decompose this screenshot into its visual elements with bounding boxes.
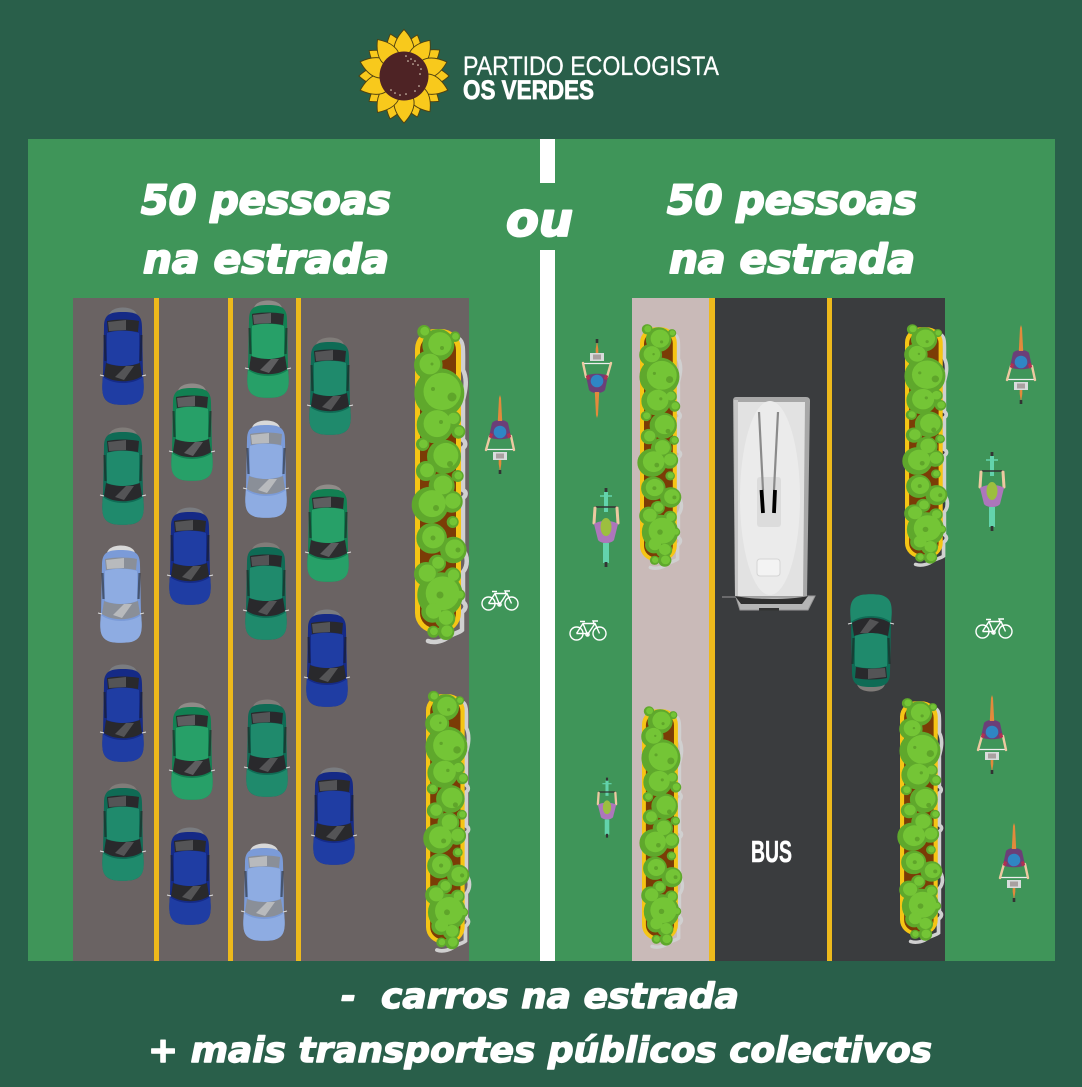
car: blue (167, 828, 213, 925)
cyclist: far right 4 (999, 823, 1029, 902)
panel: green background (28, 139, 1055, 961)
car: green (305, 484, 351, 582)
panel: left road with cars (73, 298, 469, 961)
road label: BUS: BUS (751, 834, 792, 869)
footer text line 1: - carros na estrada (341, 977, 739, 1017)
cyclist: left lane (485, 395, 515, 474)
panel: right road (632, 298, 945, 961)
car: blue (100, 308, 146, 405)
car: right road teal (848, 594, 894, 692)
car: teal (100, 784, 146, 881)
heading: ou: ou (506, 193, 573, 247)
sidewalk (632, 298, 709, 961)
planter: sidewalk upper (638, 325, 681, 568)
planter: right road lower (898, 699, 942, 942)
bus (722, 397, 815, 610)
icon: bicycle right lane (570, 621, 606, 640)
cyclist: far right 1 (1006, 325, 1036, 404)
road surface (709, 298, 945, 961)
car: teal (100, 428, 146, 525)
car: green (169, 384, 215, 481)
planter: left road upper (413, 326, 467, 642)
heading: left: 50 pessoas (141, 178, 391, 224)
car: blue (304, 610, 350, 707)
cyclist: far right 2 (980, 452, 1004, 531)
logo text line 1: PARTIDO ECOLOGISTA (463, 51, 719, 81)
icon: sunflower (357, 29, 451, 123)
divider: centre white line (540, 139, 555, 961)
car: green (245, 300, 291, 398)
heading: right: na estrada (669, 237, 915, 283)
cyclist: right lane 1 (582, 339, 612, 418)
icon: bicycle left lane (482, 591, 518, 610)
car: light blue (241, 844, 287, 941)
cyclist: right lane 2 (594, 488, 618, 567)
heading: right: 50 pessoas (667, 178, 917, 224)
car: teal (244, 700, 290, 797)
car: green (169, 702, 215, 800)
heading: left: na estrada (143, 237, 389, 283)
car: teal (243, 542, 289, 640)
planter: left road lower (424, 692, 469, 951)
car: blue (100, 664, 146, 762)
car: light blue (98, 546, 144, 643)
cyclist: far right 3 (977, 695, 1007, 774)
planter: right road upper (903, 325, 947, 565)
heading: right (667, 178, 917, 283)
logo: Partido Ecologista Os Verdes (357, 29, 719, 123)
car: blue (311, 768, 357, 865)
logo text line 2: OS VERDES (463, 75, 594, 105)
cyclist: right lane 3 (598, 778, 616, 838)
car: teal (307, 338, 353, 435)
car: blue (167, 508, 213, 605)
footer text line 2: + mais transportes públicos colectivos (148, 1031, 932, 1071)
planter: sidewalk lower (640, 707, 682, 947)
heading: left (141, 178, 391, 283)
car: light blue (243, 420, 289, 518)
icon: bicycle far right (976, 619, 1012, 638)
